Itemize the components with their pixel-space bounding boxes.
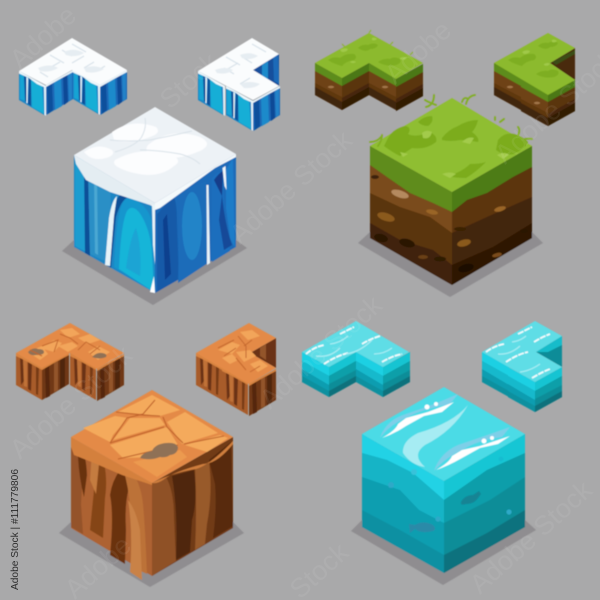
ice left face <box>74 155 155 293</box>
water right face <box>444 434 525 573</box>
grass L block right <box>494 33 575 126</box>
watermarks: Adobe <box>379 15 457 89</box>
desert left face <box>71 437 152 580</box>
ice big cube <box>62 107 247 305</box>
shadow: water cube <box>351 520 536 585</box>
water left face <box>362 434 444 573</box>
water L block right <box>482 321 562 412</box>
shadow: desert cube <box>59 522 244 587</box>
watermarks: Stock <box>154 47 225 114</box>
stock id caption: Adobe Stock | #111779806 <box>9 469 21 590</box>
water top face <box>362 387 525 481</box>
watermarks: Adobe Stock <box>254 289 388 414</box>
water L block left <box>302 321 410 397</box>
grass tufts <box>370 95 532 146</box>
grass top face <box>370 98 532 192</box>
desert top face <box>71 390 233 483</box>
ice top face <box>74 107 236 203</box>
ice L block right <box>198 38 280 131</box>
desert right face <box>152 437 233 576</box>
watermarks: Adobe Stock <box>4 339 138 464</box>
watermarks: Adobe <box>4 0 82 74</box>
desert rock <box>140 443 178 459</box>
water big cube <box>351 387 536 585</box>
watermarks: Adobe Stock <box>224 124 358 249</box>
grass big cube <box>358 95 543 297</box>
shadow: grass cube <box>358 232 543 297</box>
grass right face <box>452 146 532 285</box>
desert L block right <box>196 323 276 416</box>
grass left face <box>370 146 452 285</box>
desert big cube <box>59 390 244 587</box>
ice L block left <box>19 38 127 116</box>
desert L block left <box>16 323 124 401</box>
shadow: ice cube <box>62 240 247 305</box>
grass L block left <box>315 30 423 111</box>
watermarks: Adobe Stock <box>464 474 598 599</box>
ice right face <box>155 154 236 293</box>
